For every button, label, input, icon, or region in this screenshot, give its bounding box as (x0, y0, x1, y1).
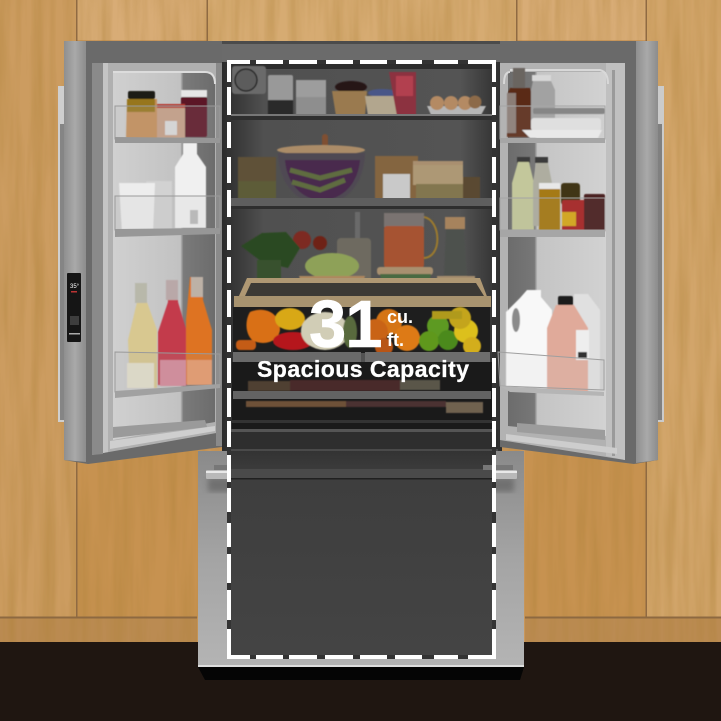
top glass shelf (227, 116, 497, 120)
right door bins (498, 106, 605, 396)
right door bin items (506, 68, 605, 392)
shadow under refrigerator (198, 667, 524, 680)
left door handle (58, 86, 65, 422)
door control panel (67, 273, 81, 342)
cabinet top of refrigerator (205, 41, 517, 64)
dark capacity overlay on drawer (228, 451, 495, 657)
dashed capacity outline (227, 60, 496, 659)
freezer drawer (198, 451, 524, 667)
drawer handle shadow (208, 478, 514, 492)
capacity figure: 31 cu. ft. (309, 287, 413, 362)
wood crisper shelf (234, 278, 491, 307)
drawer handle (206, 465, 517, 480)
lower deli drawer (228, 362, 498, 454)
lower shelf contents (241, 212, 475, 296)
caption: Spacious Capacity: Spacious Capacity (257, 356, 469, 382)
capacity figure: 31 cu. ft.: 31 (309, 287, 382, 362)
left door bin items (119, 90, 212, 388)
middle shelf contents (238, 134, 480, 206)
left door (64, 41, 222, 464)
crisper drawers with produce (233, 307, 490, 362)
dark floor (0, 642, 721, 721)
middle glass shelf (231, 198, 493, 209)
capacity figure: 31 cu. ft.: ft. (387, 330, 404, 350)
center refrigerator cavity (222, 62, 502, 454)
top shelf contents (232, 66, 486, 117)
right door (498, 41, 658, 464)
right door handle (657, 86, 664, 422)
door control panel: 35° (70, 284, 80, 290)
capacity figure: 31 cu. ft.: cu. (387, 307, 413, 327)
left door bins (115, 106, 220, 398)
